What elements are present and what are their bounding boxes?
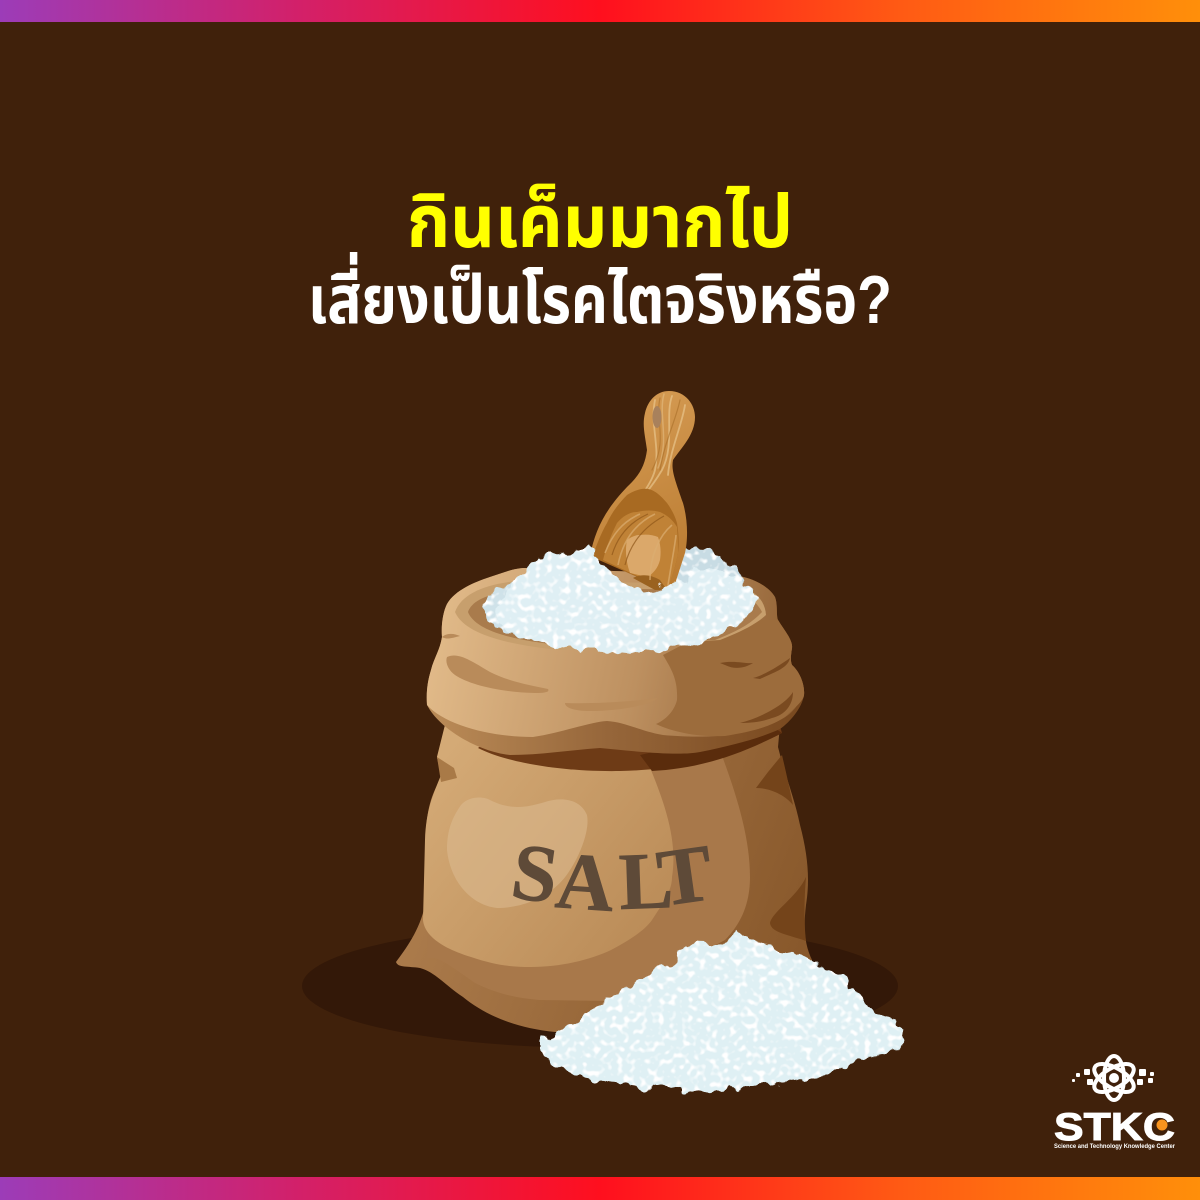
scoop wood grain bbox=[612, 394, 685, 530]
back salt bbox=[670, 546, 745, 605]
logo icon: atom bbox=[1072, 1056, 1154, 1100]
scoop bowl bbox=[592, 489, 679, 590]
collar bbox=[427, 568, 804, 755]
title bbox=[308, 180, 892, 338]
bottom gradient bar bbox=[0, 1177, 1200, 1200]
sack body bbox=[396, 725, 812, 1040]
neck band bbox=[478, 720, 782, 771]
STKC logo bbox=[1054, 1056, 1176, 1150]
SALT label: SALT bbox=[506, 826, 718, 929]
salt pile bbox=[543, 932, 905, 1092]
logo tagline: Science and Technology Knowledge Center bbox=[1054, 1144, 1176, 1150]
collar rim bbox=[455, 580, 766, 650]
illustration: salt sack bbox=[396, 391, 812, 1040]
title line 2: เสี่ยงเป็นโรคไตจริงหรือ? bbox=[308, 252, 892, 338]
salt in sack bbox=[495, 546, 758, 653]
collar right shade bbox=[656, 620, 804, 736]
ground shadow bbox=[302, 924, 898, 1048]
logo wordmark: STKC bbox=[1054, 1106, 1175, 1149]
collar creases bbox=[446, 655, 548, 693]
wooden scoop bbox=[590, 391, 695, 590]
top gradient bar bbox=[0, 0, 1200, 22]
left salt lobe bbox=[483, 582, 540, 640]
logo dot bbox=[1156, 1120, 1168, 1130]
title line 1: กินเค็มมากไป bbox=[407, 180, 793, 263]
